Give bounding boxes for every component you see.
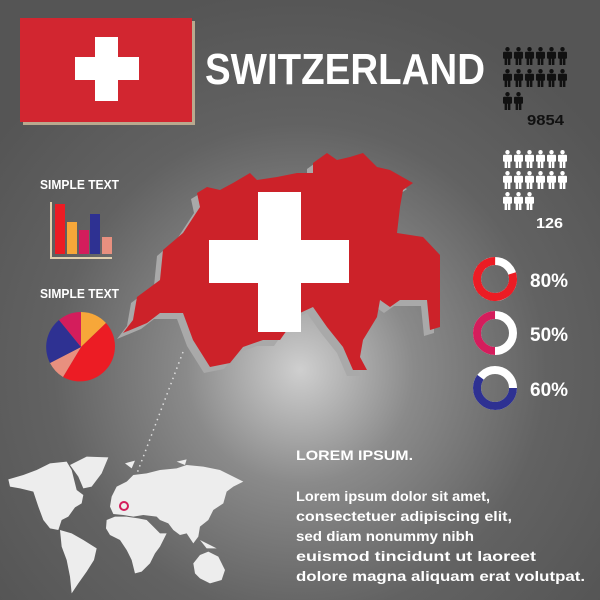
text block: Lorem ipsum dolor sit amet,: [296, 489, 490, 504]
people: black 9854: [503, 47, 567, 129]
text block: dolore magna aliquam erat volutpat.: [296, 569, 585, 584]
icon: location marker: [120, 502, 128, 510]
people: white 126: 126: [536, 215, 563, 232]
bar chart: [51, 202, 112, 258]
flag: [20, 18, 195, 125]
dotted connector: [125, 352, 183, 505]
heading: pie chart: SIMPLE TEXT: [40, 286, 119, 301]
world map: [8, 457, 243, 593]
heading: bar chart: SIMPLE TEXT: [40, 177, 119, 192]
donut 50%: [477, 315, 568, 351]
text block: LOREM IPSUM.: [296, 447, 413, 463]
map: Switzerland: [117, 153, 440, 376]
icon: map cross: [209, 192, 349, 332]
donut 60%: [477, 370, 568, 406]
donut 60%: 60%: [530, 380, 568, 401]
people: black 9854: 9854: [527, 112, 565, 129]
text block: sed diam nonummy nibh: [296, 529, 474, 544]
text block: euismod tincidunt ut laoreet: [296, 549, 537, 564]
donut 50%: 50%: [530, 325, 568, 346]
text block: consectetuer adipiscing elit,: [296, 509, 512, 524]
title: SWITZERLAND: [205, 45, 485, 94]
text block: [296, 447, 585, 584]
donut 80%: 80%: [530, 271, 568, 292]
pie chart: [46, 312, 115, 381]
people: white 126: [503, 150, 567, 232]
donut 80%: [472, 256, 568, 302]
